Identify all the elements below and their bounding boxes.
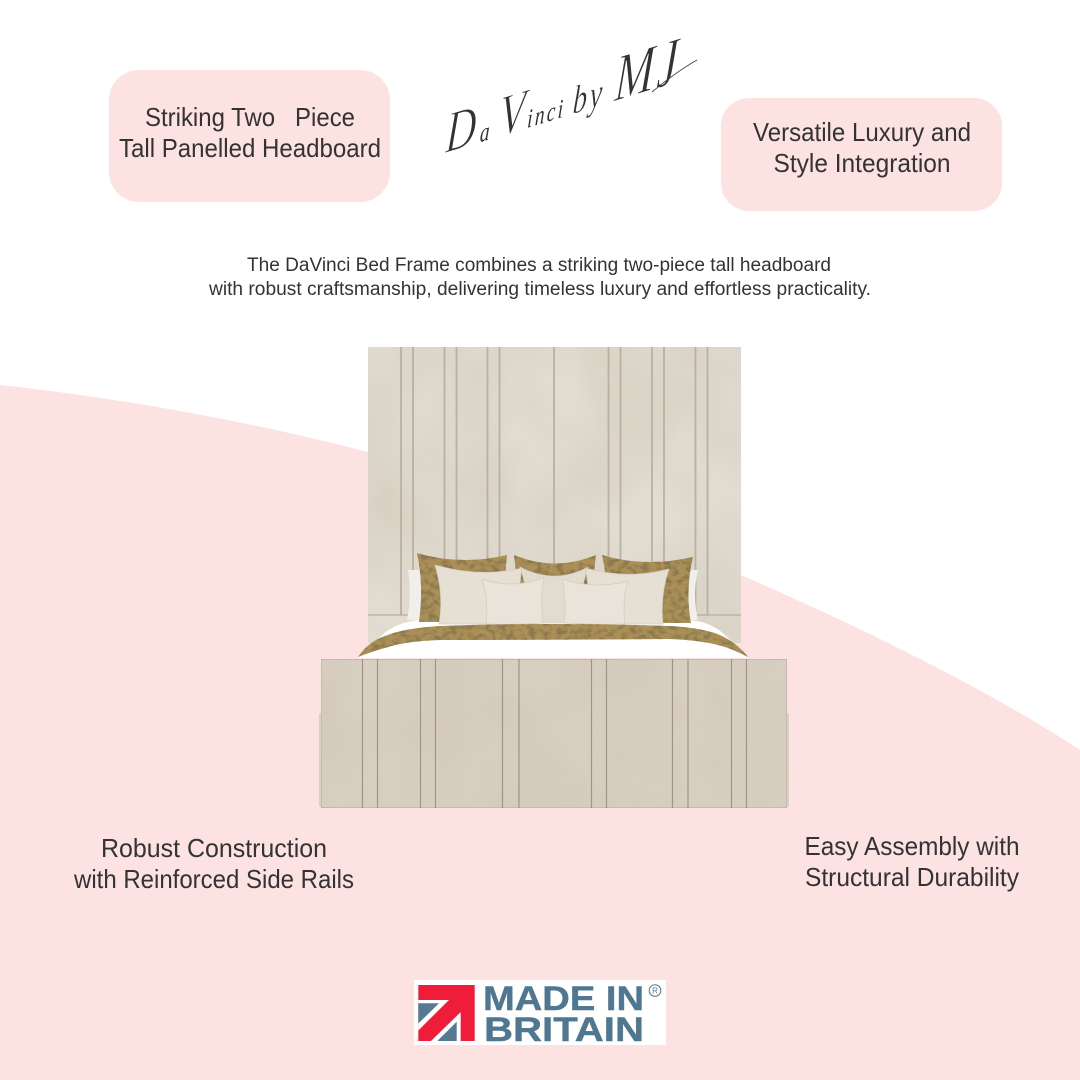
callout: striking headboard: Striking Two Piece bbox=[145, 102, 355, 132]
pink curved background bbox=[0, 385, 1080, 1080]
feature text: easy assembly: Structural Durability bbox=[805, 862, 1019, 892]
made in britain badge bbox=[414, 980, 666, 1049]
description text bbox=[208, 255, 871, 300]
callout: striking headboard bbox=[109, 70, 390, 202]
badge wordmark: R bbox=[652, 986, 658, 996]
feature text: easy assembly bbox=[804, 831, 1020, 892]
footboard bbox=[319, 659, 789, 808]
feature text: robust construction: with Reinforced Side Rails bbox=[73, 864, 354, 894]
callout: striking headboard: Tall Panelled Headboard bbox=[119, 133, 381, 163]
feature text: robust construction: Robust Construction bbox=[101, 833, 327, 863]
callout: versatile luxury: Versatile Luxury and bbox=[753, 117, 971, 147]
badge wordmark bbox=[483, 980, 661, 1049]
gold back pillows bbox=[417, 553, 693, 623]
headboard bbox=[368, 347, 741, 643]
bed illustration bbox=[319, 347, 789, 808]
description text: with robust craftsmanship, delivering timeless luxury and effortless practicality. bbox=[208, 279, 871, 300]
signature logo: Da Vinci by MJ bbox=[443, 23, 683, 168]
description text: The DaVinci Bed Frame combines a striking two-piece tall headboard bbox=[247, 255, 831, 276]
feature text: robust construction bbox=[73, 833, 354, 894]
back white pillows bbox=[407, 570, 698, 620]
cream pillows bbox=[435, 565, 669, 624]
gold throw bbox=[358, 624, 748, 657]
white mattress and sheet bbox=[358, 620, 748, 658]
callout: versatile luxury: Style Integration bbox=[774, 148, 950, 178]
callout: versatile luxury bbox=[721, 98, 1002, 211]
feature text: easy assembly: Easy Assembly with bbox=[804, 831, 1020, 861]
badge wordmark: BRITAIN bbox=[484, 1011, 644, 1049]
badge wordmark: MADE IN bbox=[483, 980, 644, 1018]
icon: union flag arrow bbox=[418, 985, 475, 1041]
